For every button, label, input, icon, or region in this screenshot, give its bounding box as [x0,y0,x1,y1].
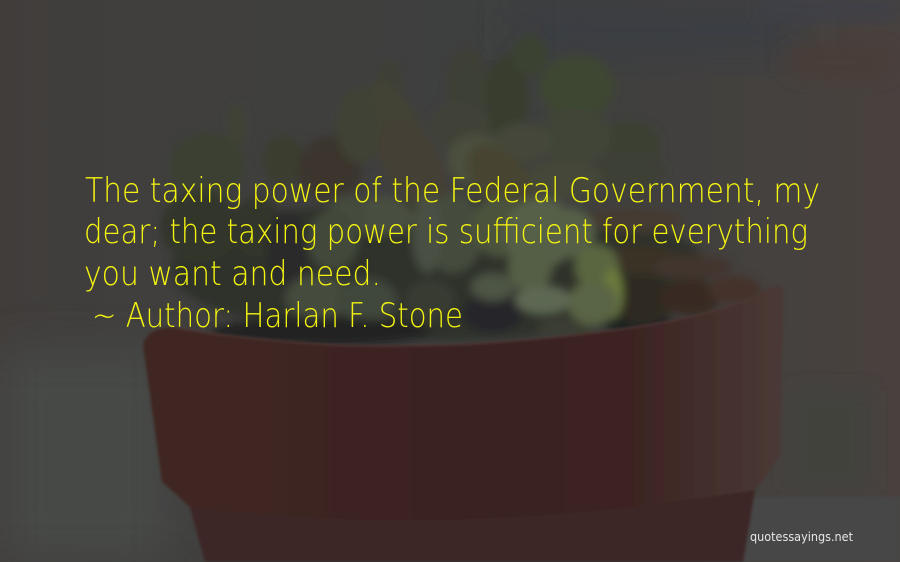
terracotta pot [143,286,784,562]
watermark: quotessayings.net [750,529,853,544]
author attribution: ~ Author: Harlan F. Stone [92,296,463,336]
quote line 1: The taxing power of the Federal Government, my [85,171,820,211]
succulent plant [160,35,761,346]
quote line 3: you want and need. [84,254,381,294]
